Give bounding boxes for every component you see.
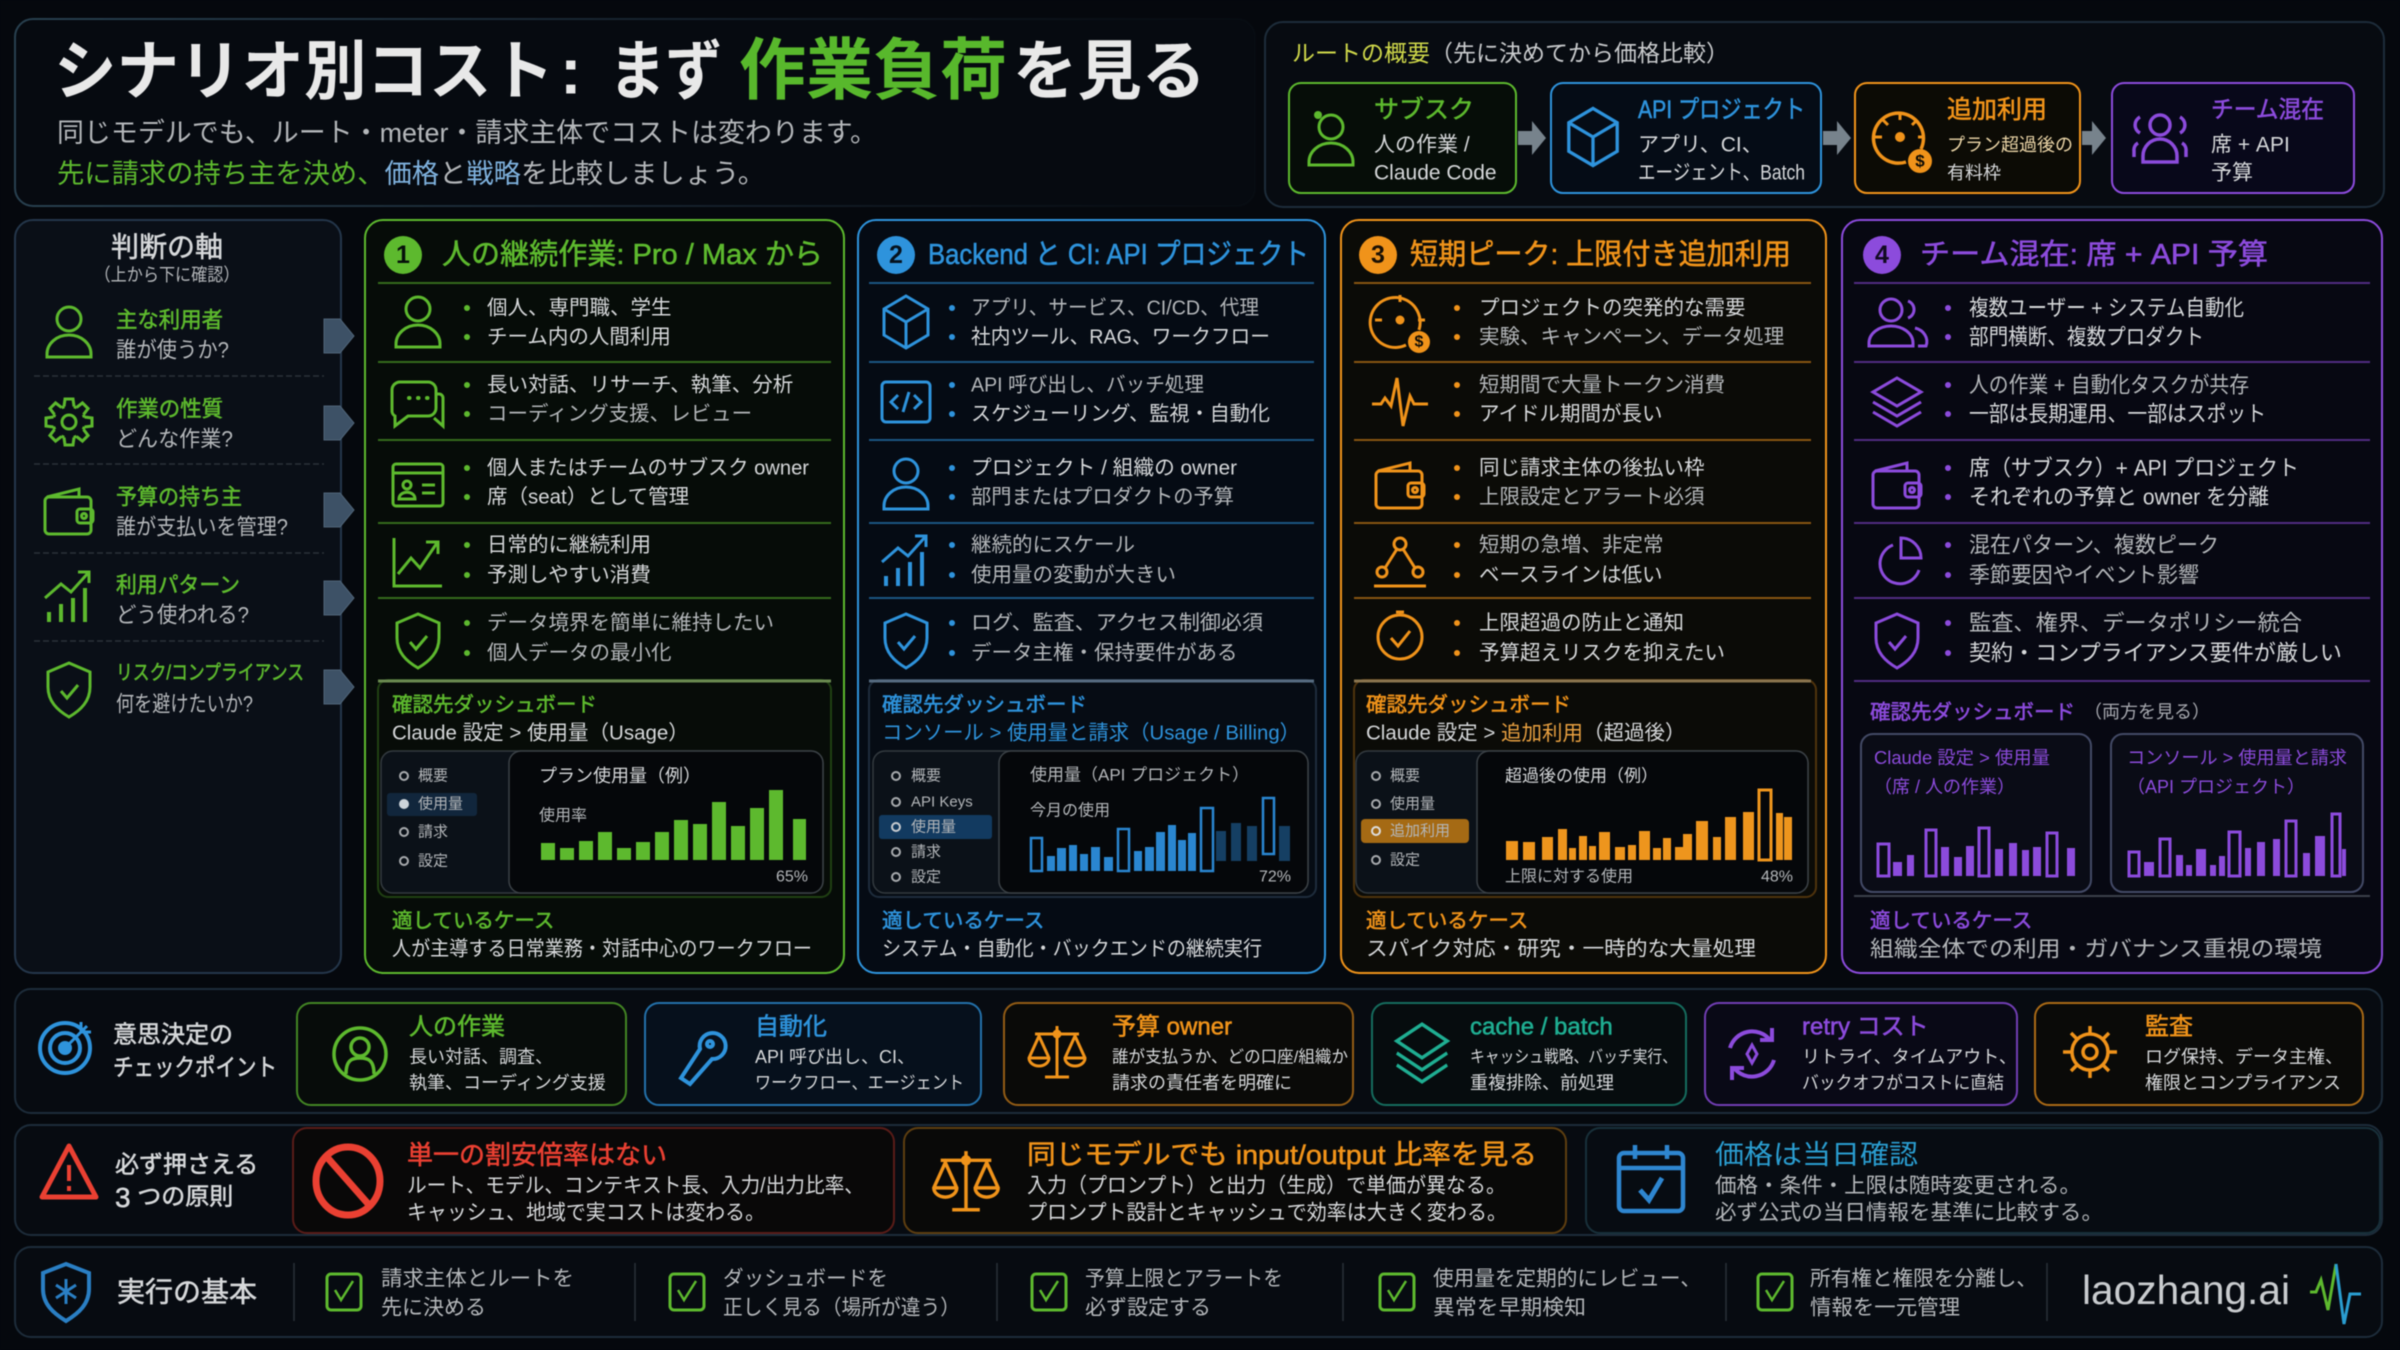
icon: gauge with dollar: $ (1915, 152, 1925, 170)
dashboard mock: 設定 (1390, 852, 1420, 868)
row: risk (885, 612, 1264, 668)
execution heading: 実行の基本 (117, 1276, 257, 1308)
axis: usage pattern: どう使われる? (116, 602, 249, 628)
route card: extra usage: 有料枠 (1947, 163, 2001, 183)
panel: execution basics (15, 1247, 2382, 1337)
number badge: 3 (1371, 241, 1385, 269)
row: work (882, 374, 1270, 426)
row: users: チーム内の人間利用 (487, 326, 671, 348)
title (54, 34, 1206, 108)
row: users: $ (1415, 334, 1424, 350)
icon: target (40, 1022, 91, 1073)
item: budget cap (1032, 1268, 1283, 1320)
dashboard mock: 65% (776, 868, 808, 886)
panel: decision axes sidebar: （上から下に確認） (94, 265, 240, 285)
row: work: API 呼び出し、バッチ処理 (971, 374, 1204, 396)
dashboard mock: 上限に対する使用 (1505, 868, 1633, 886)
card: audit: 監査 (2145, 1014, 2193, 1040)
row: users (1370, 295, 1784, 353)
principle: check price today: 価格は当日確認 (1715, 1140, 1918, 1170)
card: budget owner (1004, 1003, 1353, 1105)
subtitle (57, 118, 877, 189)
row: work: スケジューリング、監視・自動化 (971, 402, 1270, 426)
dashboard box: コンソール > 使用量と請求（Usage / Billing） (882, 722, 1300, 744)
row: pattern: 継続的にスケール (971, 534, 1135, 556)
row: owner: 部門またはプロダクトの予算 (971, 486, 1234, 508)
dashboard mock (873, 751, 1308, 893)
principle: check price today (1586, 1128, 2380, 1233)
item: review usage (1380, 1268, 1701, 1320)
route card: API project: アプリ、CI、 (1638, 134, 1763, 156)
number badge (1863, 236, 1901, 274)
dashboard mock: 概要 (418, 768, 448, 784)
principle: no single multiple: ルート、モデル、コンテキスト長、入力/出力比率、 (407, 1174, 864, 1198)
principles heading: 3 つの原則 (115, 1182, 233, 1212)
card: automation (645, 1003, 981, 1105)
column heading: 人の継続作業: Pro / Max から (442, 238, 823, 271)
axis: user (47, 307, 354, 362)
principle: input output ratio: プロンプト設計とキャッシュで効率は大きく変わる。 (1027, 1202, 1507, 1224)
title: : (560, 34, 582, 108)
card: retry cost: retry コスト (1802, 1014, 1929, 1040)
arrow (2082, 121, 2106, 155)
bar chart (2129, 814, 2346, 876)
item: ownership: 所有権と権限を分離し、 (1810, 1268, 2037, 1290)
dashboard mock (1356, 751, 1808, 893)
suitable case: 適しているケース (882, 910, 1044, 932)
dashboard box: Claude 設定 > 使用量（Usage） (392, 722, 689, 744)
axis: user: 主な利用者 (116, 308, 223, 332)
route card: extra usage: 追加利用 (1947, 96, 2047, 124)
subtitle: 先に請求の持ち主を決め、価格と戦略を比較しましょう。 (57, 159, 765, 189)
icon: shield star (43, 1264, 89, 1321)
row: pattern: 予測しやすい消費 (487, 564, 651, 586)
axis: risk (48, 662, 354, 717)
checkpoints heading (113, 1022, 277, 1082)
title: を見る (1013, 34, 1206, 108)
row: pattern (1374, 534, 1664, 586)
dashboard box (378, 680, 831, 897)
suitable case: 適しているケース (1366, 910, 1528, 932)
dashboard box: 確認先ダッシュボード （両方を見る） (1870, 700, 2210, 724)
dashboard mock: 請求 (418, 824, 448, 840)
route card: API project (1551, 83, 1821, 193)
dashboard box (869, 680, 1316, 897)
route card: subscription (1289, 83, 1516, 193)
item: ownership: 情報を一元管理 (1810, 1296, 1960, 1320)
axis: usage pattern: 利用パターン (116, 572, 240, 598)
suitable case: スパイク対応・研究・一時的な大量処理 (1366, 938, 1756, 960)
route card: API project: エージェント、Batch (1638, 162, 1805, 184)
panel: three principles (15, 1125, 2382, 1235)
suitable case (882, 910, 1262, 960)
row: pattern (394, 534, 651, 586)
row: pattern: 季節要因やイベント影響 (1969, 562, 2199, 588)
principle: input output ratio: 同じモデルでも input/output 比率を見る (1027, 1140, 1537, 1170)
bar chart (541, 790, 806, 860)
row: owner (1873, 456, 2299, 510)
card: audit: ログ保持、データ主権、 (2145, 1047, 2343, 1067)
card: budget owner: 誰が支払うか、どの口座/組織か (1112, 1048, 1348, 1066)
row: owner: プロジェクト / 組織の owner (971, 456, 1237, 480)
dashboard mock: プラン使用量（例） (539, 766, 701, 786)
row: work (392, 374, 793, 426)
card: human work: 執筆、コーディング支援 (409, 1073, 606, 1093)
row: risk: 契約・コンプライアンス要件が厳しい (1969, 640, 2342, 666)
card: budget owner: 請求の責任者を明確に (1112, 1073, 1292, 1093)
dashboard mock: 使用率 (539, 806, 587, 824)
card: retry cost (1705, 1003, 2017, 1105)
row: work: 人の作業 + 自動化タスクが共存 (1969, 372, 2249, 398)
row: users: 社内ツール、RAG、ワークフロー (971, 326, 1270, 348)
dashboard mock: 請求 (911, 844, 941, 860)
row: owner (1376, 456, 1705, 508)
mini panel: Claude settings: Claude 設定 > 使用量 (1874, 748, 2050, 768)
logo: laozhang.ai (2082, 1267, 2290, 1313)
dashboard mock: 今月の使用 (1030, 802, 1110, 820)
card: human work: 人の作業 (409, 1014, 505, 1040)
row: risk (1378, 612, 1725, 664)
card: audit (2035, 1003, 2363, 1105)
row: users: プロジェクトの突発的な需要 (1479, 296, 1746, 320)
panel: column 3 short peak (1341, 220, 1826, 973)
axis: work nature: どんな作業? (116, 426, 233, 452)
dashboard mock: 設定 (911, 868, 941, 886)
number badge: 1 (396, 241, 410, 269)
route card: team mix: チーム混在 (2211, 96, 2324, 124)
dashboard mock (381, 751, 823, 893)
suitable case: 人が主導する日常業務・対話中心のワークフロー (392, 938, 812, 960)
suitable case: 適しているケース (392, 910, 554, 932)
row: users (884, 296, 1270, 348)
row: work (1372, 374, 1725, 426)
axis: budget owner (45, 484, 354, 540)
row: users (1869, 296, 2244, 350)
axis: risk: リスク/コンプライアンス (116, 662, 304, 684)
checkpoints heading: 意思決定の (113, 1022, 233, 1048)
row: pattern: 混在パターン、複数ピーク (1969, 532, 2219, 558)
principles heading: 必ず押さえる (115, 1152, 258, 1178)
suitable case (1870, 910, 2322, 962)
row: pattern: 短期の急増、非定常 (1479, 534, 1664, 556)
principle: no single multiple: キャッシュ、地域で実コストは変わる。 (407, 1202, 765, 1224)
card: automation: API 呼び出し、CI、 (755, 1047, 915, 1067)
checkpoints heading: チェックポイント (113, 1054, 277, 1082)
card: automation: ワークフロー、エージェント (755, 1073, 964, 1093)
axis: user: 誰が使うか? (116, 338, 229, 362)
row: risk (1876, 610, 2342, 668)
number badge (877, 236, 915, 274)
row: pattern (1880, 532, 2219, 588)
row: risk: 監査、権界、データポリシー統合 (1969, 610, 2302, 636)
logo (2082, 1264, 2361, 1324)
row: work (1873, 372, 2266, 426)
dashboard mock: 使用量 (1390, 796, 1435, 812)
row: owner: 席（サブスク）+ API プロジェクト (1969, 456, 2299, 480)
card: budget owner: 予算 owner (1112, 1014, 1232, 1040)
principles heading (115, 1152, 258, 1212)
bar chart (1878, 828, 2075, 876)
row: owner: 同じ請求主体の後払い枠 (1479, 456, 1704, 480)
principle: check price today: 価格・条件・上限は随時変更される。 (1715, 1174, 2081, 1198)
card: cache batch: cache / batch (1470, 1014, 1613, 1040)
route card: subscription: サブスク (1374, 96, 1474, 124)
arrow (1823, 121, 1851, 155)
dashboard mock: 使用量 (418, 796, 463, 812)
row: risk: 個人データの最小化 (487, 642, 672, 664)
panel: column 4 team mix (1842, 220, 2382, 973)
item: dashboard: 正しく見る（場所が違う） (723, 1296, 960, 1320)
item: budget cap: 必ず設定する (1085, 1296, 1211, 1320)
route card: extra usage (1855, 83, 2080, 193)
row: pattern (882, 534, 1176, 586)
route card: extra usage: プラン超過後の (1947, 135, 2073, 155)
panel: column 1 human work (365, 220, 844, 973)
dashboard box (1854, 700, 2370, 896)
dashboard mock: 超過後の使用（例） (1505, 766, 1658, 786)
card: human work (297, 1003, 626, 1105)
dashboard box: Claude 設定 > 追加利用（超過後） (1366, 722, 1686, 744)
dashboard mock: 使用量（API プロジェクト） (1030, 764, 1249, 784)
mini panel: console: コンソール > 使用量と請求 (2127, 748, 2347, 768)
row: users: 個人、専門職、学生 (487, 296, 672, 320)
row: users (396, 296, 672, 348)
dashboard box: 確認先ダッシュボード (882, 694, 1087, 716)
principle: no single multiple: 単一の割安倍率はない (407, 1140, 667, 1170)
row: risk: ログ、監査、アクセス制御必須 (971, 612, 1264, 634)
row: owner (884, 456, 1237, 509)
axis: work nature (46, 396, 354, 452)
row: work: 長い対話、リサーチ、執筆、分析 (487, 374, 793, 396)
column heading: 短期ピーク: 上限付き追加利用 (1410, 238, 1791, 271)
dashboard mock: 48% (1761, 868, 1793, 886)
dashboard box: 確認先ダッシュボード (1366, 694, 1571, 716)
item: review usage: 使用量を定期的にレビュー、 (1433, 1268, 1701, 1290)
number badge: 2 (889, 241, 903, 269)
mini panel: console (2111, 734, 2363, 892)
route card: team mix (2112, 83, 2354, 193)
item: review usage: 異常を早期検知 (1433, 1296, 1586, 1320)
column heading: チーム混在: 席 + API 予算 (1920, 238, 2268, 271)
header panel (15, 19, 1255, 206)
dashboard mock: 設定 (418, 852, 448, 870)
title: シナリオ別コスト (54, 34, 554, 108)
row: work: 短期間で大量トークン消費 (1479, 374, 1725, 396)
axis: budget owner: 誰が支払いを管理? (116, 514, 288, 540)
row: owner: 個人またはチームのサブスク owner (487, 456, 809, 480)
row: owner: 席（seat）として管理 (487, 486, 689, 508)
arrow (1518, 121, 1546, 155)
dashboard box: 確認先ダッシュボード (392, 694, 597, 716)
dashboard mock: API Keys (911, 794, 973, 810)
panel: decision axes sidebar (15, 220, 354, 973)
axis: budget owner: 予算の持ち主 (116, 484, 242, 510)
row: risk: データ境界を簡単に維持したい (487, 612, 774, 634)
card: human work: 長い対話、調査、 (409, 1047, 553, 1067)
row: risk: データ主権・保持要件がある (971, 642, 1238, 664)
principle: no single multiple (293, 1128, 894, 1233)
dashboard box (1354, 680, 1816, 897)
route card: subscription: Claude Code (1374, 162, 1497, 184)
row: risk: 予算超えリスクを抑えたい (1479, 642, 1725, 664)
row: pattern: 日常的に継続利用 (487, 534, 651, 556)
title: 作業負荷 (739, 34, 1007, 108)
mini panel: console: （API プロジェクト） (2127, 777, 2305, 797)
card: audit: 権限とコンプライアンス (2145, 1073, 2341, 1093)
item: ownership (1758, 1268, 2037, 1320)
dashboard mock: 概要 (911, 768, 941, 784)
icon: gauge with dollar (1873, 112, 1932, 173)
bar chart (1506, 790, 1792, 860)
title: まず (609, 34, 722, 108)
number badge (1359, 236, 1397, 274)
route card: subscription: 人の作業 / (1374, 134, 1470, 156)
row: users: 実験、キャンペーン、データ処理 (1479, 326, 1784, 348)
suitable case (392, 910, 812, 960)
row: risk (397, 612, 774, 668)
number badge (384, 236, 422, 274)
axis: work nature: 作業の性質 (116, 396, 223, 422)
card: retry cost: バックオフがコストに直結 (1802, 1073, 2004, 1093)
card: cache batch (1372, 1003, 1686, 1105)
suitable case: 組織全体での利用・ガバナンス重視の環境 (1870, 936, 2322, 962)
row: users: 複数ユーザー + システム自動化 (1969, 296, 2244, 320)
principle: input output ratio (904, 1128, 1566, 1233)
route card: API project: API プロジェクト (1638, 96, 1805, 124)
sidebar heading: 判断の軸 (111, 232, 223, 262)
axis: risk: 何を避けたいか? (116, 692, 253, 716)
panel: column 2 backend (858, 220, 1325, 973)
route heading: ルートの概要（先に決めてから価格比較） (1292, 40, 1729, 66)
dashboard mock: 追加利用 (1390, 822, 1450, 840)
number badge: 4 (1875, 241, 1889, 269)
item: decide owner: 請求主体とルートを (381, 1268, 574, 1290)
dashboard mock: 使用量 (911, 818, 956, 836)
mini panel: Claude settings: （席 / 人の作業） (1874, 777, 2015, 797)
route card: team mix: 席 + API (2211, 134, 2290, 156)
icon: pulse logo (2310, 1264, 2361, 1324)
row: work: 一部は長期運用、一部はスポット (1969, 402, 2266, 426)
panel: route overview (1265, 22, 2384, 207)
item: dashboard: ダッシュボードを (723, 1268, 888, 1290)
row: work: コーディング支援、レビュー (487, 402, 752, 426)
row: risk: 上限超過の防止と通知 (1479, 612, 1684, 634)
item: decide owner (327, 1268, 574, 1320)
axis: usage pattern (45, 572, 354, 628)
suitable case (1366, 910, 1756, 960)
dashboard mock: 72% (1259, 868, 1291, 886)
card: cache batch: キャッシュ戦略、バッチ実行、 (1470, 1048, 1677, 1066)
suitable case: 適しているケース (1870, 910, 2032, 932)
item: budget cap: 予算上限とアラートを (1085, 1268, 1283, 1290)
row: owner: 上限設定とアラート必須 (1479, 486, 1705, 508)
row: pattern: 使用量の変動が大きい (971, 564, 1176, 586)
mini panel: Claude settings (1861, 734, 2091, 892)
row: owner (393, 456, 809, 508)
item: decide owner: 先に決める (381, 1296, 486, 1320)
icon: team (2134, 115, 2186, 162)
card: retry cost: リトライ、タイムアウト、 (1802, 1047, 2017, 1067)
row: pattern: ベースラインは低い (1479, 564, 1662, 586)
column heading: Backend と CI: API プロジェクト (928, 239, 1309, 271)
row: users: アプリ、サービス、CI/CD、代理 (971, 296, 1259, 320)
card: automation: 自動化 (755, 1014, 827, 1040)
subtitle: 同じモデルでも、ルート・meter・請求主体でコストは変わります。 (57, 118, 877, 148)
dashboard mock: 概要 (1390, 768, 1420, 784)
principle: input output ratio: 入力（プロンプト）と出力（生成）で単価が異なる。 (1027, 1174, 1506, 1198)
principle: check price today: 必ず公式の当日情報を基準に比較する。 (1715, 1202, 2103, 1224)
item: dashboard (670, 1268, 960, 1320)
icon: warning triangle (42, 1146, 96, 1197)
card: cache batch: 重複排除、前処理 (1470, 1073, 1614, 1093)
bar chart (1031, 798, 1290, 871)
suitable case: システム・自動化・バックエンドの継続実行 (882, 938, 1262, 960)
route card: team mix: 予算 (2211, 162, 2253, 184)
panel: decision checkpoints (15, 989, 2382, 1113)
row: owner: それぞれの予算と owner を分離 (1969, 484, 2269, 510)
row: work: アイドル期間が長い (1479, 402, 1662, 426)
row: users: 部門横断、複数プロダクト (1969, 324, 2204, 350)
